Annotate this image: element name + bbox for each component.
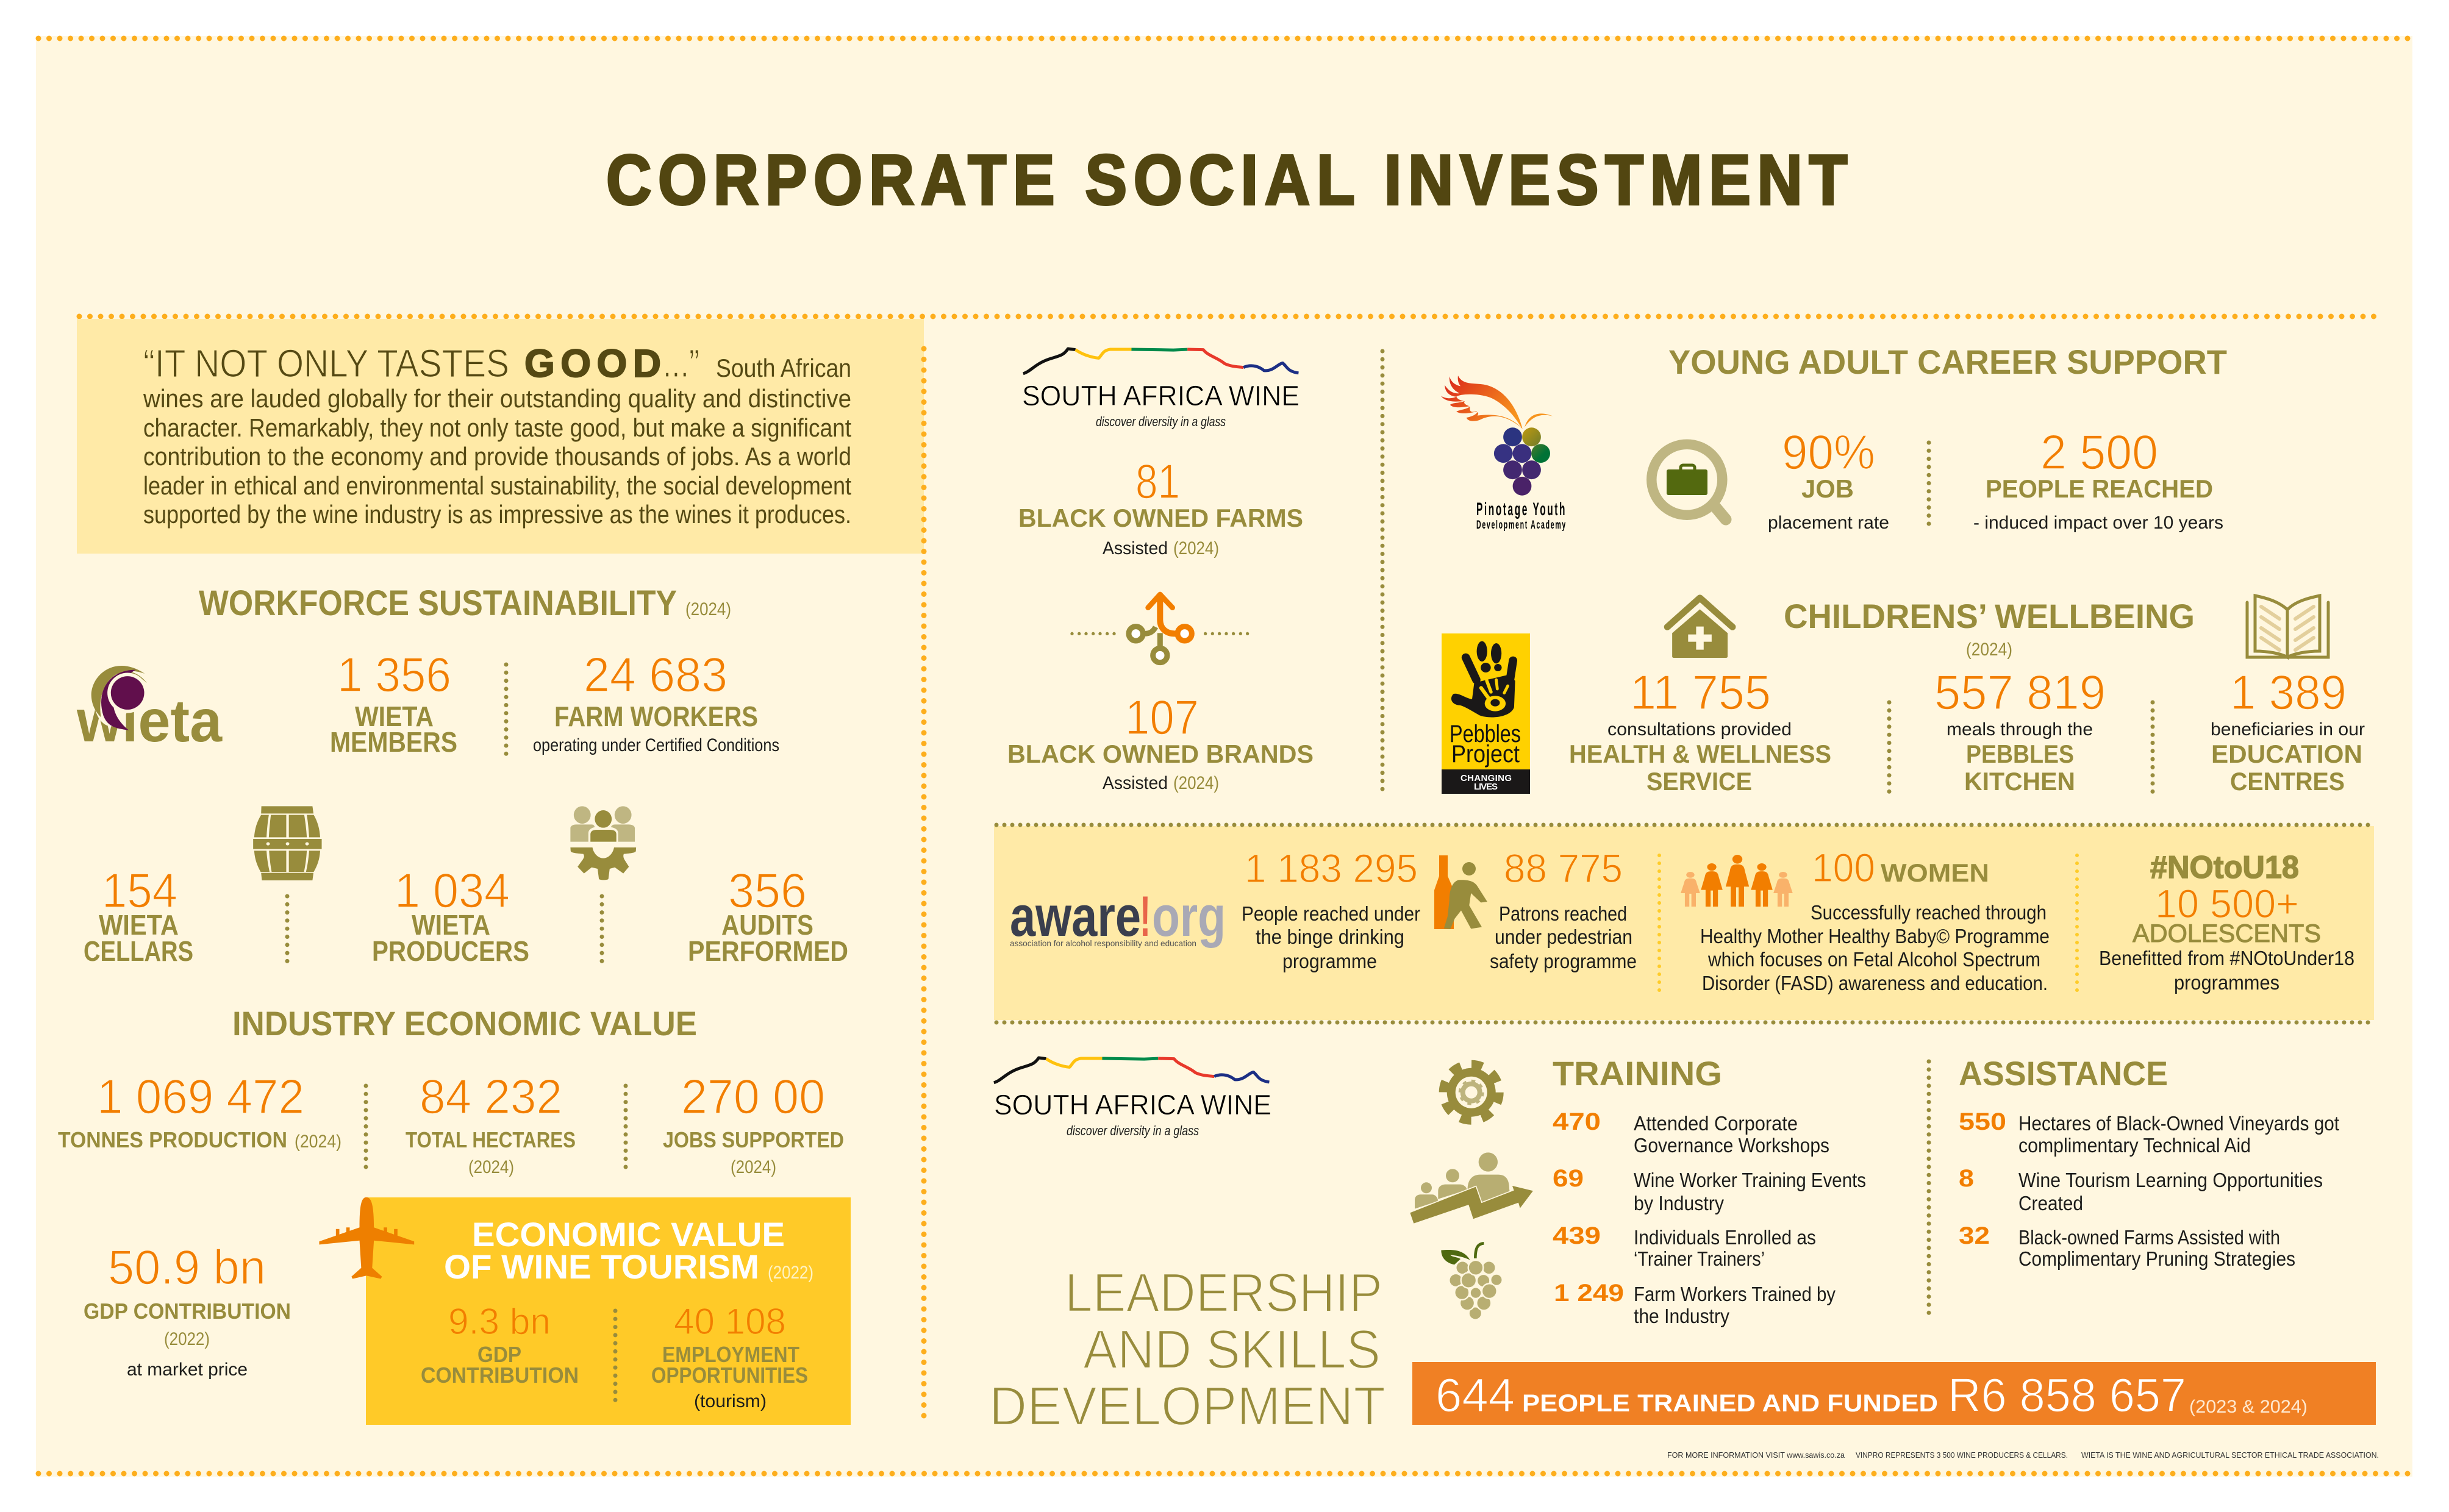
logo: aware.org: aware xyxy=(1010,884,1141,948)
list item: 550 xyxy=(1959,1108,2339,1157)
logo: south africa wine lower: discover diversity in a glass xyxy=(1067,1123,1199,1138)
stat: audits performed xyxy=(688,863,848,967)
heading: childrens wellbeing: CHILDRENS’ WELLBEING xyxy=(1784,597,2195,635)
stat: audits performed: PERFORMED xyxy=(688,935,848,967)
logo: pebbles project: LIVES xyxy=(1474,782,1498,792)
stat: job placement: 90% xyxy=(1782,425,1875,479)
logo: south africa wine: SOUTH AFRICA WINE xyxy=(1022,380,1300,412)
heading: industry economic value: INDUSTRY ECONOMIC VALUE xyxy=(232,1004,697,1043)
icon: gear xyxy=(1445,1066,1498,1119)
stat: women reached xyxy=(1700,845,2050,994)
footer notes: VINPRO REPRESENTS 3 500 WINE PRODUCERS & CELLARS. xyxy=(1856,1450,2068,1460)
list item: 69: 69 xyxy=(1553,1165,1584,1192)
list item: 8 xyxy=(1959,1165,2323,1214)
list item: 32: Black-owned Farms Assisted with xyxy=(2018,1226,2280,1249)
panel: aware.org band xyxy=(994,825,2374,1022)
icon: people and gear xyxy=(570,806,636,880)
stat: wieta cellars: CELLARS xyxy=(84,935,193,967)
stat: women reached: 100 xyxy=(1812,845,1875,890)
stat: tourism gdp: GDP xyxy=(477,1342,521,1367)
list item: 32: Complimentary Pruning Strategies xyxy=(2018,1247,2295,1270)
intro body text: South African xyxy=(716,354,851,382)
stat: wieta members: MEMBERS xyxy=(330,726,457,758)
stat: tonnes production: TONNES PRODUCTION xyxy=(58,1127,287,1152)
stat: education centres: beneficiaries in our xyxy=(2211,719,2365,740)
stat: pebbles kitchen xyxy=(1934,665,2106,796)
stat: women reached: Successfully reached through xyxy=(1811,901,2047,924)
stat: black owned farms xyxy=(1018,454,1303,558)
stat: job placement: JOB xyxy=(1801,474,1854,503)
footer notes: WIETA IS THE WINE AND AGRICULTURAL SECTOR ETHICAL TRADE ASSOCIATION. xyxy=(2081,1450,2379,1460)
intro body text: wines are lauded globally for their outstanding quality and distinctive xyxy=(143,384,851,413)
stat: pebbles kitchen: KITCHEN xyxy=(1964,767,2075,796)
stat: wieta members: WIETA xyxy=(355,701,434,732)
stat: education centres xyxy=(2211,665,2365,796)
stat: binge drinking: People reached under xyxy=(1242,902,1420,925)
stat: tourism employment: (tourism) xyxy=(694,1391,767,1411)
stat: farm workers: FARM WORKERS xyxy=(554,701,758,732)
stat: audits performed: AUDITS xyxy=(721,909,813,941)
heading: leadership and skills development: LEADERSHIP xyxy=(1065,1263,1382,1324)
banner: people trained and funded: R6 858 657 xyxy=(1948,1368,2186,1422)
icon: walking person xyxy=(1444,862,1487,929)
stat: women reached: Disorder (FASD) awareness and education. xyxy=(1702,972,2048,994)
stat: education centres: CENTRES xyxy=(2230,767,2345,796)
list item: 439 xyxy=(1553,1222,1816,1270)
stat: NOtoU18 adolescents: programmes xyxy=(2174,971,2279,994)
stat: jobs supported: (2024) xyxy=(731,1157,776,1177)
heading: training: TRAINING xyxy=(1553,1054,1722,1093)
stat: tourism gdp: CONTRIBUTION xyxy=(421,1363,579,1388)
stat: gdp contribution xyxy=(84,1240,291,1380)
logo: south africa wine lower: SOUTH AFRICA WINE xyxy=(994,1089,1271,1121)
intro body text xyxy=(143,354,851,529)
logo: south africa wine xyxy=(1022,349,1300,429)
quote heading: ...” xyxy=(663,341,699,385)
icon: bottle xyxy=(1434,855,1454,929)
panel: training xyxy=(1553,1054,1866,1327)
stat: binge drinking xyxy=(1242,846,1420,972)
list item: 1 249: the Industry xyxy=(1634,1305,1729,1327)
logo: pebbles project: Pebbles xyxy=(1450,721,1521,747)
banner: people trained and funded: 644 xyxy=(1435,1368,1515,1422)
logo: south africa wine lower xyxy=(994,1058,1271,1138)
footer notes: FOR MORE INFORMATION VISIT www.sawis.co.za xyxy=(1667,1450,1845,1460)
stat: health and wellness: SERVICE xyxy=(1646,767,1752,796)
panel: industry economic value xyxy=(58,1004,851,1425)
stat: audits performed: 356 xyxy=(728,863,807,918)
quote heading: “IT NOT ONLY TASTES xyxy=(143,341,509,385)
icon: people and rising arrow xyxy=(1410,1152,1533,1224)
heading: leadership and skills development: AND SKILLS xyxy=(1083,1319,1381,1380)
stat: binge drinking: programme xyxy=(1282,950,1377,972)
stat: jobs supported: JOBS SUPPORTED xyxy=(663,1127,844,1152)
quote heading: GOOD xyxy=(524,341,661,385)
stat: farm workers xyxy=(533,647,779,755)
intro body text: supported by the wine industry is as impressive as the wines it produces. xyxy=(143,500,851,529)
title: CORPORATE SOCIAL INVESTMENT xyxy=(606,140,1854,219)
stat: binge drinking: the binge drinking xyxy=(1256,925,1404,948)
stat: tourism gdp xyxy=(421,1301,579,1388)
icon: branching arrow xyxy=(1070,594,1249,663)
stat: job placement xyxy=(1768,425,1889,533)
stat: NOtoU18 adolescents: Benefitted from #NOtoUnder18 xyxy=(2099,947,2354,969)
stat: total hectares: TOTAL HECTARES xyxy=(406,1127,576,1152)
list item: 69: Wine Worker Training Events xyxy=(1634,1169,1866,1191)
stat: wieta producers: 1 034 xyxy=(395,863,510,918)
list item: 470: 470 xyxy=(1553,1108,1601,1135)
stat: black owned farms: Assisted xyxy=(1103,538,1168,558)
logo: aware.org: association for alcohol responsibility and education xyxy=(1010,938,1196,948)
list item: 1 249: 1 249 xyxy=(1554,1280,1624,1307)
stat: pedestrian safety: 88 775 xyxy=(1504,846,1623,891)
heading: wine tourism xyxy=(444,1215,813,1286)
stat: pedestrian safety xyxy=(1490,846,1637,972)
stat: wieta members: 1 356 xyxy=(337,647,451,702)
logo: pinotage youth: Development Academy xyxy=(1476,519,1567,532)
list item: 550: Hectares of Black-Owned Vineyards got xyxy=(2018,1112,2339,1135)
heading: childrens wellbeing xyxy=(1784,597,2195,660)
stat: tourism gdp: 9.3 bn xyxy=(448,1301,551,1342)
logo: pinotage youth xyxy=(1441,376,1567,532)
icon: barrel xyxy=(253,806,322,880)
stat: gdp contribution: at market price xyxy=(127,1360,248,1380)
icon: magnifier with briefcase xyxy=(1651,444,1726,519)
logo: wieta: wieta xyxy=(76,687,223,754)
list item: 1 249 xyxy=(1554,1280,1836,1327)
stat: women reached: Healthy Mother Healthy Baby© Programme xyxy=(1700,925,2050,947)
list item: 69 xyxy=(1553,1165,1866,1214)
logo: south africa wine: discover diversity in a glass xyxy=(1096,414,1226,429)
list item: 69: by Industry xyxy=(1634,1192,1724,1214)
panel: assistance xyxy=(1959,1054,2339,1270)
heading: workforce sustainability: (2024) xyxy=(685,599,731,619)
stat: education centres: 1 389 xyxy=(2230,665,2347,719)
heading: young adult career support: YOUNG ADULT CAREER SUPPORT xyxy=(1668,343,2227,381)
list item: 8: Wine Tourism Learning Opportunities xyxy=(2018,1169,2323,1191)
stat: jobs supported xyxy=(663,1069,844,1177)
stat: total hectares: (2024) xyxy=(468,1157,514,1177)
icon: grapes xyxy=(1441,1243,1503,1320)
stat: black owned farms: 81 xyxy=(1135,454,1180,508)
heading: workforce sustainability: WORKFORCE SUSTAINABILITY xyxy=(199,583,677,623)
stat: tonnes production xyxy=(58,1069,341,1152)
panel: intro quote xyxy=(77,319,924,554)
stat: black owned brands: Assisted xyxy=(1103,773,1168,793)
heading: leadership and skills development xyxy=(989,1263,1385,1437)
stat: pedestrian safety: under pedestrian xyxy=(1495,925,1632,948)
icon: health house xyxy=(1667,598,1732,658)
heading: wine tourism: ECONOMIC VALUE xyxy=(472,1215,785,1253)
list item: 550: complimentary Technical Aid xyxy=(2018,1134,2251,1157)
list item: 470 xyxy=(1553,1108,1829,1157)
stat: jobs supported: 270 00 xyxy=(681,1069,825,1124)
logo: aware.org: ! xyxy=(1140,884,1151,948)
stat: health and wellness: consultations provided xyxy=(1607,719,1792,740)
intro body text: character. Remarkably, they not only taste good, but make a significant xyxy=(143,413,851,442)
stat: wieta cellars: WIETA xyxy=(99,909,179,941)
stat: binge drinking: 1 183 295 xyxy=(1245,846,1418,891)
stat: women reached: which focuses on Fetal Alcohol Spectrum xyxy=(1707,948,2040,971)
heading: assistance: ASSISTANCE xyxy=(1959,1054,2168,1093)
list item: 470: Attended Corporate xyxy=(1634,1112,1798,1135)
stat: job placement: placement rate xyxy=(1768,513,1889,533)
stat: wieta cellars: 154 xyxy=(102,863,177,918)
stat: health and wellness xyxy=(1569,665,1831,796)
stat: health and wellness: HEALTH & WELLNESS xyxy=(1569,740,1831,768)
stat: pedestrian safety: Patrons reached xyxy=(1499,902,1627,925)
stat: NOtoU18 adolescents: 10 500+ xyxy=(2155,881,2299,926)
list item: 470: Governance Workshops xyxy=(1634,1134,1829,1157)
stat: total hectares xyxy=(406,1069,576,1177)
stat: people reached xyxy=(1973,425,2223,533)
logo: pinotage youth: Pinotage Youth xyxy=(1476,499,1567,519)
intro body text: leader in ethical and environmental sustainability, the social development xyxy=(143,471,851,500)
stat: NOtoU18 adolescents: #NOtoU18 xyxy=(2150,850,2299,885)
intro body text: contribution to the economy and provide thousands of jobs. As a world xyxy=(143,442,851,471)
stat: tourism employment: OPPORTUNITIES xyxy=(651,1363,808,1388)
list item: 550: 550 xyxy=(1959,1108,2006,1135)
stat: black owned farms: BLACK OWNED FARMS xyxy=(1018,504,1303,532)
stat: pebbles kitchen: PEBBLES xyxy=(1966,740,2074,768)
stat: people reached: PEOPLE REACHED xyxy=(1986,474,2213,503)
stat: NOtoU18 adolescents: ADOLESCENTS xyxy=(2133,919,2321,947)
icon: open book xyxy=(2247,596,2328,657)
banner: people trained and funded: PEOPLE TRAINED AND FUNDED xyxy=(1522,1390,1938,1417)
panel: workforce sustainability xyxy=(76,583,848,967)
heading: wine tourism: (2022) xyxy=(768,1263,813,1283)
logo: pebbles project xyxy=(1442,633,1530,794)
stat: women reached: WOMEN xyxy=(1881,858,1989,887)
list item: 1 249: Farm Workers Trained by xyxy=(1634,1283,1836,1305)
stat: health and wellness: 11 755 xyxy=(1630,665,1771,719)
stat: gdp contribution: 50.9 bn xyxy=(108,1240,266,1294)
stat: wieta producers xyxy=(372,863,529,967)
stat: gdp contribution: GDP CONTRIBUTION xyxy=(84,1299,291,1324)
stat: black owned brands: 107 xyxy=(1125,690,1199,744)
stat: tonnes production: (2024) xyxy=(295,1132,341,1152)
stat: black owned brands: BLACK OWNED BRANDS xyxy=(1007,740,1314,768)
stat: farm workers: 24 683 xyxy=(584,647,728,702)
stat: wieta producers: WIETA xyxy=(412,909,490,941)
stat: black owned brands: (2024) xyxy=(1173,773,1219,793)
list item: 8: 8 xyxy=(1959,1165,1974,1192)
list item: 439: Individuals Enrolled as xyxy=(1634,1226,1816,1249)
stat: pebbles kitchen: meals through the xyxy=(1947,719,2093,740)
list item: 32 xyxy=(1959,1222,2295,1270)
logo: pebbles project: Project xyxy=(1451,741,1520,768)
stat: tourism employment: 40 108 xyxy=(674,1301,786,1342)
stat: wieta cellars xyxy=(84,863,193,967)
stat: people reached: - induced impact over 10 years xyxy=(1973,513,2223,533)
logo: aware.org: org xyxy=(1152,884,1226,948)
stat: tourism employment xyxy=(651,1301,808,1411)
list item: 8: Created xyxy=(2018,1192,2083,1214)
stat: total hectares: 84 232 xyxy=(420,1069,562,1124)
heading: childrens wellbeing: (2024) xyxy=(1966,640,2012,660)
stat: wieta producers: PRODUCERS xyxy=(372,935,529,967)
footer notes xyxy=(1667,1450,2379,1460)
banner: people trained and funded xyxy=(1412,1362,2376,1425)
stat: pedestrian safety: safety programme xyxy=(1490,950,1637,972)
stat: tonnes production: 1 069 472 xyxy=(97,1069,304,1124)
stat: NOtoU18 adolescents xyxy=(2099,850,2354,994)
list item: 439: ‘Trainer Trainers’ xyxy=(1634,1247,1765,1270)
stat: black owned farms: (2024) xyxy=(1173,538,1219,558)
list item: 439: 439 xyxy=(1553,1222,1601,1249)
stat: farm workers: operating under Certified Conditions xyxy=(533,735,779,755)
stat: people reached: 2 500 xyxy=(2040,425,2158,479)
stat: pebbles kitchen: 557 819 xyxy=(1934,665,2106,719)
banner: people trained and funded: (2023 & 2024) xyxy=(2189,1397,2308,1417)
icon: women group xyxy=(1681,855,1793,907)
stat: wieta members xyxy=(330,647,457,758)
stat: black owned brands xyxy=(1007,690,1314,793)
stat: gdp contribution: (2022) xyxy=(164,1329,210,1349)
stat: education centres: EDUCATION xyxy=(2211,740,2362,768)
stat: tourism employment: EMPLOYMENT xyxy=(662,1342,799,1367)
logo: pebbles project: CHANGING xyxy=(1460,773,1512,783)
icon: plane xyxy=(319,1197,414,1278)
heading: wine tourism: OF WINE TOURISM xyxy=(444,1247,759,1286)
panel: wine tourism xyxy=(366,1197,851,1425)
list item: 32: 32 xyxy=(1959,1222,1990,1249)
heading: leadership and skills development: DEVELOPMENT xyxy=(989,1376,1385,1437)
